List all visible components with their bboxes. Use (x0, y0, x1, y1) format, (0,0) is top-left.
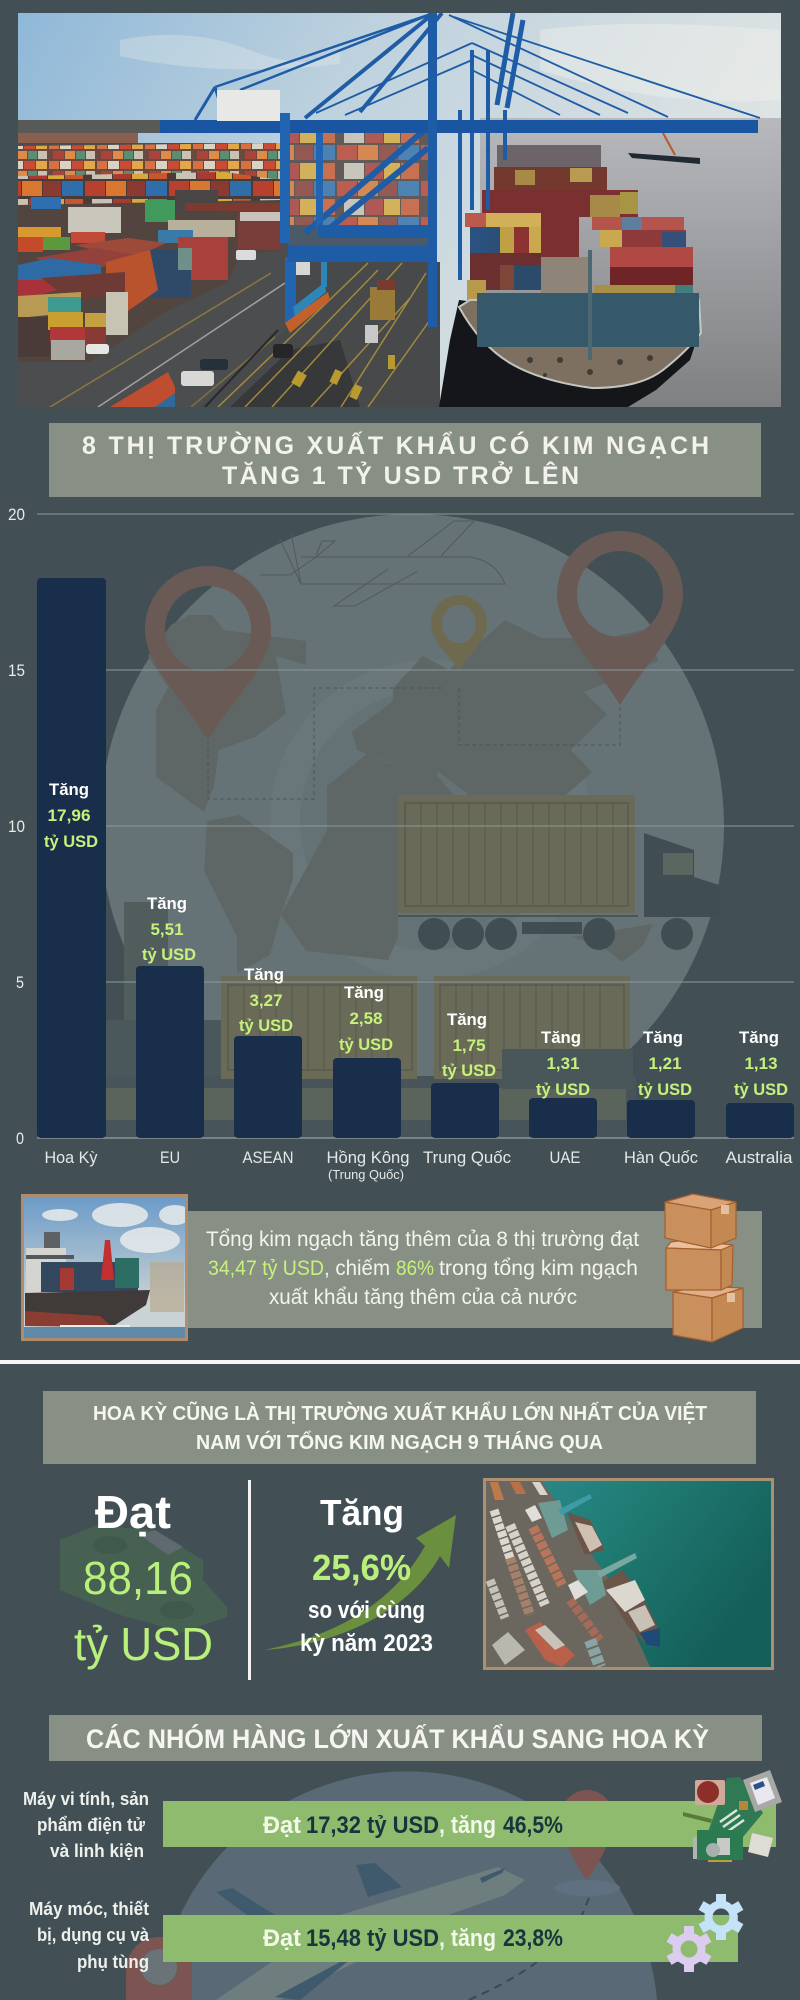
value labels: Tăng (147, 894, 187, 913)
value labels: 2,58 (350, 1009, 382, 1028)
row: computers and electronics: Máy vi tính, sản (23, 1789, 149, 1809)
row: computers and electronics: và linh kiện (50, 1841, 144, 1861)
chart background illustration (100, 514, 724, 1138)
title: 8 markets (49, 423, 761, 497)
row: machinery and equipment (29, 1899, 738, 1972)
photo: aerial port (483, 1478, 774, 1670)
category labels: Hàn Quốc (624, 1148, 698, 1167)
ship hull and deck (439, 300, 700, 407)
arrow: growth (264, 1515, 456, 1650)
truck container (398, 795, 635, 913)
stat: reached 88,16: tỷ USD (74, 1618, 213, 1670)
value labels: Tăng (541, 1028, 581, 1047)
stat: reached 88,16: 88,16 (83, 1552, 193, 1604)
heading: main export groups (49, 1715, 762, 1761)
stat: up 25,6%: 25,6% (312, 1547, 411, 1588)
value labels: 1,31 (546, 1054, 580, 1073)
row: computers and electronics: , tăng (439, 1812, 496, 1839)
value labels: Tăng (344, 983, 384, 1002)
vehicles (86, 344, 109, 354)
photo: container port and ship (18, 13, 781, 407)
divider (0, 1360, 800, 1364)
value labels: tỷ USD (44, 832, 98, 851)
crane (194, 13, 760, 280)
lower illustration: port ground and containers (105, 902, 636, 1138)
row: machinery and equipment: 23,8% (503, 1925, 563, 1952)
route dashes (208, 688, 620, 799)
heading: US biggest market (43, 1391, 756, 1464)
vertical divider (248, 1480, 251, 1680)
pin: small (431, 595, 487, 670)
y axis labels: 0 (16, 1129, 24, 1148)
icon: blue gear (699, 1894, 743, 1940)
callout: total increase: Tổng kim ngạch tăng thêm của 8 thị trường đạt (206, 1228, 639, 1251)
title: 8 markets: TĂNG 1 TỶ USD TRỞ LÊN (222, 460, 579, 490)
value labels (44, 780, 788, 1099)
heading: US biggest market: NAM VỚI TỔNG KIM NGẠCH 9 THÁNG QUA (196, 1430, 603, 1454)
bars (37, 578, 794, 1138)
callout: total increase: trong tổng kim ngạch (439, 1257, 638, 1280)
category labels: ASEAN (242, 1148, 294, 1167)
behind crane (288, 133, 428, 225)
title: 8 markets: 8 THỊ TRƯỜNG XUẤT KHẨU CÓ KIM NGẠCH (82, 430, 709, 460)
row: computers and electronics: Đạt (263, 1812, 301, 1839)
icon: electronics components (683, 1770, 782, 1862)
stat: reached 88,16 (74, 1486, 213, 1670)
y axis labels: 15 (8, 661, 25, 680)
row: computers and electronics: 46,5% (503, 1812, 563, 1839)
stat: reached 88,16: Đạt (95, 1486, 171, 1538)
value labels: 17,96 (48, 806, 90, 825)
row: machinery and equipment: Đạt (263, 1925, 301, 1952)
y axis labels: 20 (8, 505, 25, 524)
value labels: 5,51 (150, 920, 184, 939)
row: computers and electronics: 17,32 tỷ USD (306, 1812, 439, 1839)
photo: cargo ship (21, 1194, 191, 1341)
y axis labels: 10 (8, 817, 25, 836)
road (288, 262, 440, 407)
callout: total increase: 86% (396, 1257, 434, 1280)
value labels: Tăng (244, 965, 284, 984)
row: machinery and equipment: Máy móc, thiết (29, 1899, 149, 1919)
row: computers and electronics: phẩm điện tử (37, 1815, 146, 1835)
chart: growth by market (8, 505, 794, 1182)
barge (628, 153, 700, 164)
value labels: Tăng (49, 780, 89, 799)
category labels: Trung Quốc (423, 1148, 511, 1167)
value labels: tỷ USD (339, 1035, 393, 1054)
yard rows (18, 143, 280, 180)
row: machinery and equipment: 15,48 tỷ USD (306, 1925, 439, 1952)
bottom background illustration (126, 1771, 657, 2000)
value labels: tỷ USD (536, 1080, 590, 1099)
value labels: 3,27 (250, 991, 282, 1010)
category labels: UAE (550, 1148, 580, 1167)
value labels: Tăng (739, 1028, 779, 1047)
row: machinery and equipment: , tăng (439, 1925, 496, 1952)
value labels: 1,13 (744, 1054, 778, 1073)
heading: main export groups: CÁC NHÓM HÀNG LỚN XUẤT KHẨU SANG HOA KỲ (86, 1723, 709, 1754)
value labels: tỷ USD (239, 1016, 293, 1035)
value labels: tỷ USD (442, 1061, 496, 1080)
pin: left (145, 566, 271, 740)
truck cab and wheels (398, 833, 719, 950)
airplane outline (260, 521, 505, 606)
heading: US biggest market: HOA KỲ CŨNG LÀ THỊ TRƯỜNG XUẤT KHẨU LỚN NHẤT CỦA VIỆT (93, 1401, 707, 1425)
row: machinery and equipment: bị, dụng cụ và (37, 1925, 150, 1945)
value labels: tỷ USD (734, 1080, 788, 1099)
category labels (44, 1148, 793, 1182)
stat: up 25,6%: Tăng (320, 1492, 404, 1533)
callout: total increase: xuất khẩu tăng thêm của cả nước (269, 1286, 577, 1309)
icon: money stack (60, 1525, 227, 1633)
y axis labels (8, 505, 25, 1148)
value labels: tỷ USD (638, 1080, 692, 1099)
container on lower road (110, 372, 175, 407)
icon: purple gear (667, 1926, 711, 1972)
row: machinery and equipment: phụ tùng (77, 1952, 149, 1972)
value labels: tỷ USD (142, 945, 196, 964)
stat: up 25,6%: so với cùng (308, 1597, 425, 1624)
value labels: Tăng (447, 1010, 487, 1029)
callout: total increase: , chiếm (324, 1257, 390, 1280)
category labels: Hoa Kỳ (44, 1148, 98, 1167)
callout: total increase (188, 1211, 762, 1328)
callout: total increase: 34,47 tỷ USD (208, 1257, 324, 1280)
value labels: 1,75 (452, 1036, 486, 1055)
stat: up 25,6%: kỳ năm 2023 (300, 1630, 433, 1657)
ship containers (494, 167, 607, 190)
row: computers and electronics (23, 1789, 776, 1861)
y axis labels: 5 (16, 973, 24, 992)
value labels: Tăng (643, 1028, 683, 1047)
grey top stack (497, 145, 601, 167)
icon: stacked boxes (665, 1194, 743, 1342)
value labels: 1,21 (648, 1054, 682, 1073)
category labels: Australia (726, 1148, 793, 1167)
category labels: Hồng Kông (326, 1148, 410, 1167)
category labels: EU (160, 1148, 180, 1167)
stat: up 25,6% (300, 1492, 433, 1657)
category labels: (Trung Quốc) (328, 1167, 404, 1182)
pin: right (557, 531, 683, 705)
